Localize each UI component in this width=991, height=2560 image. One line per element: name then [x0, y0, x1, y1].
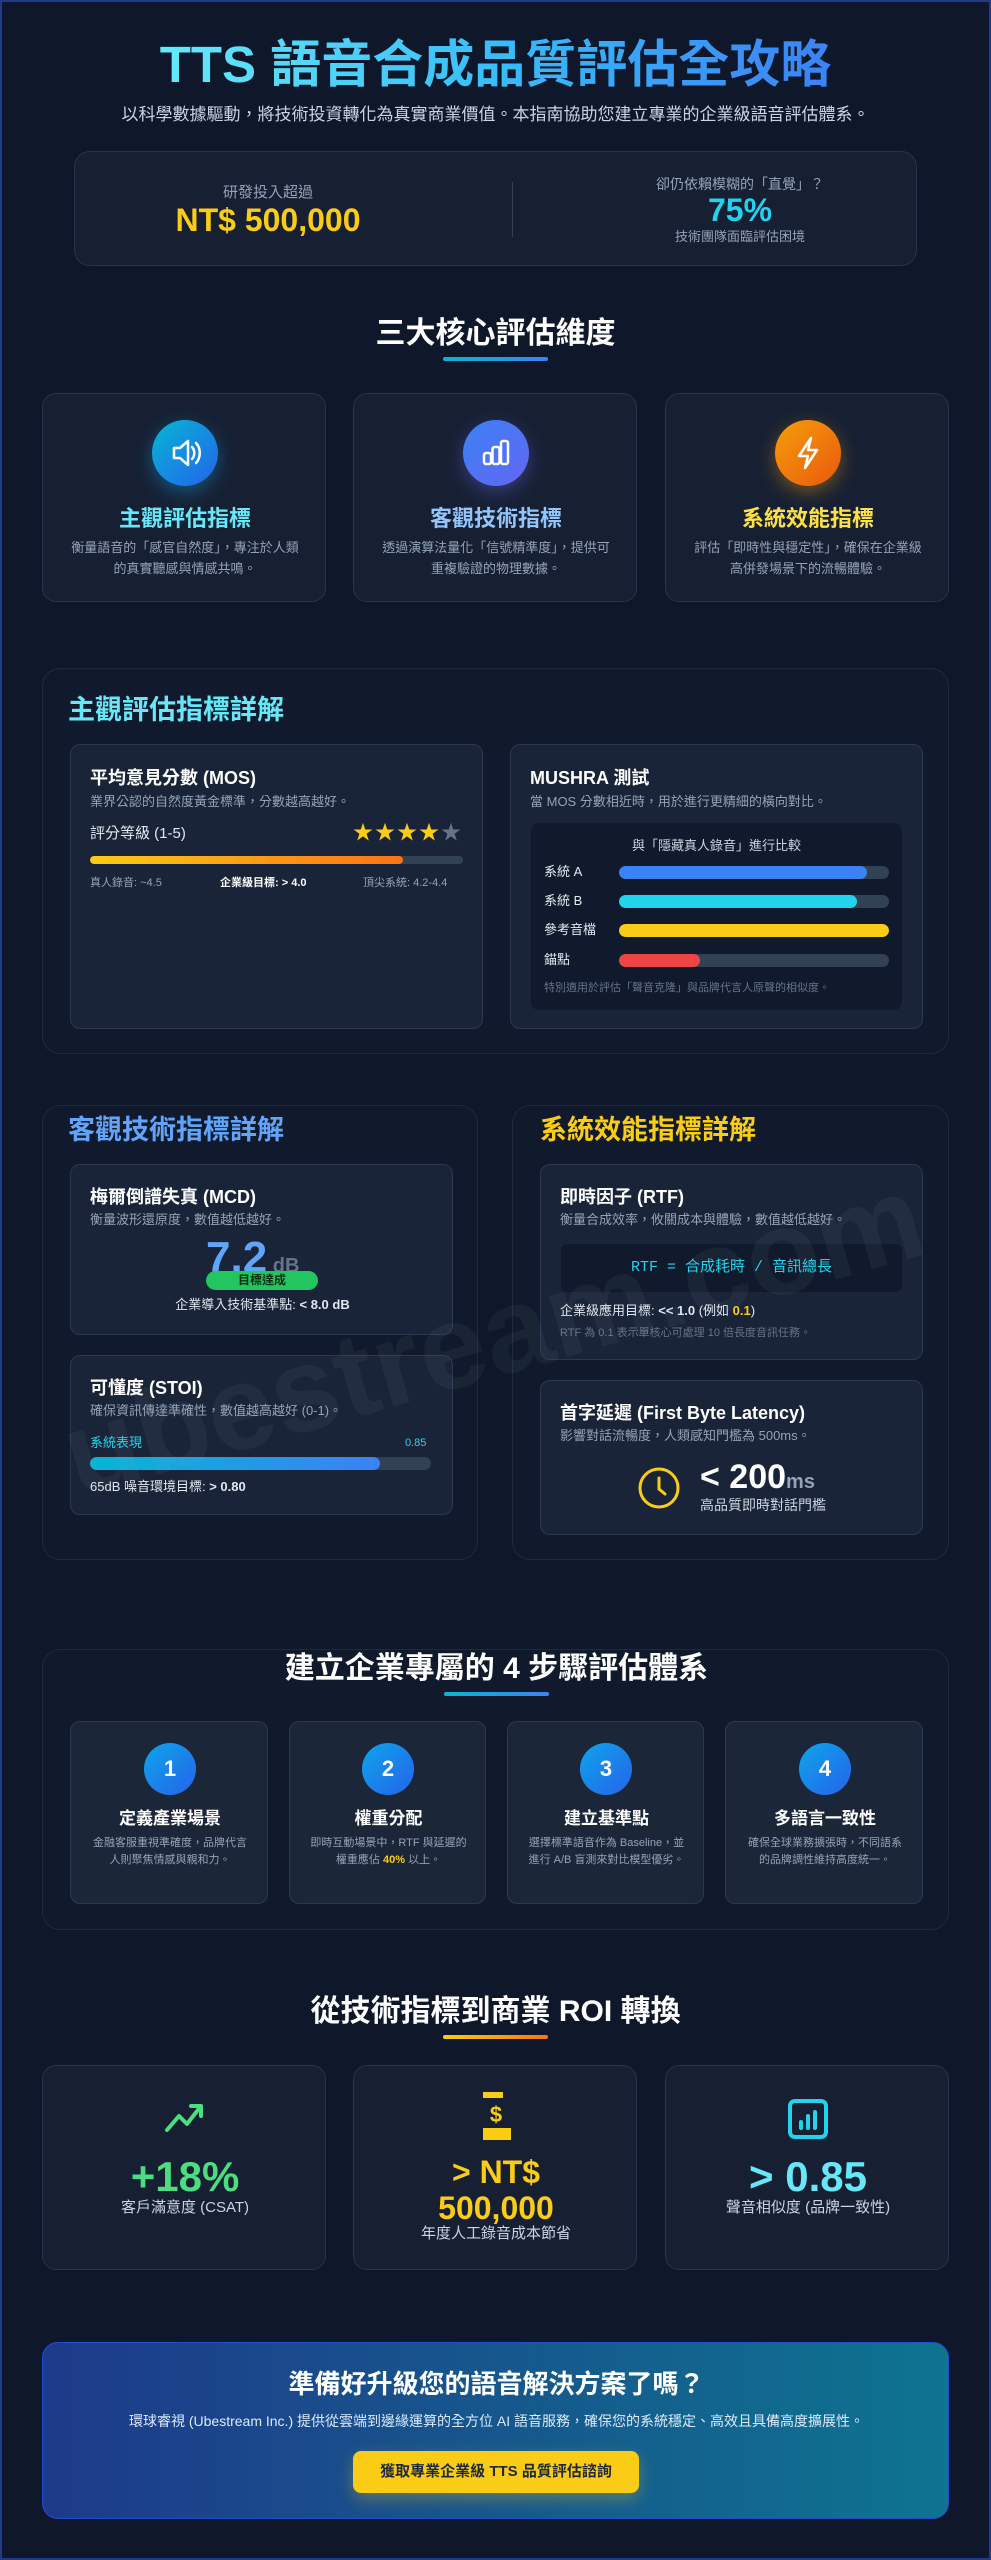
stats box: NT$ 500,000: [175, 202, 360, 238]
heading: three dimensions: 三大核心評估維度: [376, 317, 616, 350]
heading: 主觀評估指標詳解: [68, 695, 284, 725]
formula: RTF = 合成耗時 / 音訊總長: [631, 1259, 832, 1276]
ROI card: CSAT: 客戶滿意度 (CSAT): [121, 2199, 249, 2216]
ROI card: cost saving: 500,000: [438, 2190, 554, 2226]
card: MOS: [70, 744, 483, 1029]
icon: trend up: [164, 2104, 204, 2132]
ROI card: similarity: > 0.85: [749, 2153, 867, 2200]
ROI card: cost saving: > NT$: [452, 2154, 540, 2190]
card: MUSHRA: 當 MOS 分數相近時，用於進行更精細的橫向對比。: [530, 794, 827, 809]
card: performance: [665, 393, 949, 602]
card: MOS: 真人錄音: ~4.5: [90, 877, 162, 889]
ROI card: CSAT: +18%: [131, 2153, 239, 2200]
step 3: 建立基準點: [564, 1809, 649, 1828]
card: MCD: [70, 1164, 453, 1335]
step 3: 3: [600, 1756, 612, 1781]
comparison chart: 參考音檔: [544, 922, 596, 937]
button: [353, 2451, 639, 2493]
icon: money: $: [490, 2102, 502, 2127]
card: MUSHRA: MUSHRA 測試: [530, 768, 649, 788]
card: MCD: 7.2 dB: [206, 1233, 299, 1282]
card: RTF: [540, 1164, 923, 1360]
panel: objective details: 客觀技術指標詳解: [68, 1115, 284, 1145]
ROI card: CSAT: [42, 2065, 326, 2270]
CTA box: [42, 2342, 949, 2519]
card: performance: 評估「即時性與穩定性」，確保在企業級高併發場景下的流暢體驗。: [694, 540, 922, 576]
panel: 4 steps: [42, 1649, 949, 1930]
card: latency: 首字延遲 (First Byte Latency): [560, 1403, 805, 1423]
comparison chart: 與「隱藏真人錄音」進行比較: [632, 838, 801, 853]
step 4: 4: [819, 1756, 831, 1781]
CTA box: 環球睿視 (Ubestream Inc.) 提供從雲端到邊緣運算的全方位 AI 語音服務，確保您的系統穩定、高效且具備高度擴展性。: [129, 2413, 864, 2429]
card: MUSHRA: [510, 744, 923, 1029]
card: MOS: 評分等級 (1-5): [90, 825, 186, 842]
step 4: [725, 1721, 923, 1904]
card: MOS: 企業級目標: > 4.0: [220, 877, 306, 889]
title: TTS 語音合成品質評估全攻略: [160, 36, 831, 93]
stats box: [74, 151, 917, 266]
card: objective: [353, 393, 637, 602]
icon: clock: [638, 1468, 680, 1508]
card: MCD: 企業導入技術基準點: < 8.0 dB: [175, 1297, 350, 1312]
card: objective: 透過演算法量化「信號精準度」，提供可重複驗證的物理數據。: [382, 540, 610, 576]
card: MOS: 業界公認的自然度黃金標準，分數越高越好。: [90, 794, 350, 809]
badge: 目標達成: [238, 1273, 286, 1287]
step 2: 即時互動場景中，RTF 與延遲的權重應佔 40% 以上。: [310, 1837, 467, 1866]
card: RTF: RTF 為 0.1 表示單核心可處理 10 倍長度音訊任務。: [560, 1327, 811, 1339]
panel: objective details: [42, 1105, 478, 1560]
card: subjective: [42, 393, 326, 602]
card: STOI: 系統表現: [90, 1435, 142, 1450]
heading: 建立企業專屬的 4 步驟評估體系: [285, 1652, 708, 1685]
stats box: 75%: [708, 192, 772, 228]
panel: subjective details: [42, 668, 949, 1054]
card: latency: < 200ms: [700, 1458, 815, 1496]
ROI card: cost saving: 年度人工錄音成本節省: [421, 2225, 571, 2242]
icon: money: [483, 2092, 511, 2140]
ROI card: similarity: [665, 2065, 949, 2270]
heading: ROI: 從技術指標到商業 ROI 轉換: [310, 1995, 680, 2028]
card: subjective: 衡量語音的「感官自然度」，專注於人類的真實聽感與情感共鳴。: [71, 540, 299, 576]
step 2: [289, 1721, 486, 1904]
stats box: 技術團隊面臨評估困境: [675, 229, 805, 244]
step 2: 2: [382, 1756, 394, 1781]
step 3: 選擇標準語音作為 Baseline，並進行 A/B 盲測來對比模型優劣。: [529, 1837, 684, 1866]
icon: bar chart: [463, 420, 529, 486]
subtitle: 以科學數據驅動，將技術投資轉化為真實商業價值。本指南協助您建立專業的企業級語音評估體系。: [122, 105, 870, 124]
stat: 75%: 卻仍依賴模糊的「直覺」？: [656, 176, 824, 192]
comparison chart: 錨點: [544, 952, 570, 967]
card: MCD: 衡量波形還原度，數值越低越好。: [90, 1212, 285, 1227]
step 1: 定義產業場景: [119, 1809, 221, 1828]
comparison chart: 特別適用於評估「聲音克隆」與品牌代言人原聲的相似度。: [544, 982, 830, 994]
icon: chart square: [788, 2099, 828, 2139]
card: latency: 高品質即時對話門檻: [700, 1497, 826, 1513]
card: performance: 系統效能指標: [742, 506, 874, 531]
card: STOI: [70, 1355, 453, 1515]
step 1: 1: [164, 1756, 176, 1781]
card: MCD: 梅爾倒譜失真 (MCD): [90, 1187, 256, 1207]
panel: performance details: [512, 1105, 949, 1560]
watermark: ubestream.com: [48, 1149, 938, 1522]
panel: performance details: 系統效能指標詳解: [540, 1115, 756, 1145]
comparison chart: 系統 A: [544, 864, 582, 879]
icon: speaker: [152, 420, 218, 486]
badge: [206, 1271, 318, 1290]
card: STOI: 可懂度 (STOI): [90, 1378, 203, 1398]
button: 獲取專業企業級 TTS 品質評估諮詢: [380, 2463, 612, 2480]
card: RTF: 企業級應用目標: << 1.0 (例如 0.1): [560, 1303, 755, 1318]
ROI card: similarity: 聲音相似度 (品牌一致性): [726, 2199, 890, 2216]
stars: ★★★★★: [353, 822, 463, 844]
step 1: 金融客服重視準確度，品牌代言人則聚焦情感與親和力。: [93, 1837, 247, 1866]
card: STOI: 65dB 噪音環境目標: > 0.80: [90, 1479, 246, 1494]
card: latency: 影響對話流暢度，人類感知門檻為 500ms。: [560, 1428, 811, 1443]
MOS bar: [90, 856, 463, 864]
step 3: [507, 1721, 704, 1904]
comparison chart: [531, 823, 902, 1010]
card: MOS: 平均意見分數 (MOS): [90, 768, 256, 788]
card: subjective: 主觀評估指標: [119, 506, 251, 531]
comparison chart: 系統 B: [544, 893, 582, 908]
card: objective: 客觀技術指標: [430, 506, 562, 531]
CTA box: 準備好升級您的語音解決方案了嗎？: [288, 2369, 704, 2399]
card: latency: [540, 1380, 923, 1535]
ROI card: cost saving: [353, 2065, 637, 2270]
step 4: 確保全球業務擴張時，不同語系的品牌調性維持高度統一。: [748, 1837, 902, 1866]
step 2: 權重分配: [354, 1809, 422, 1828]
step 1: [70, 1721, 268, 1904]
card: STOI: 確保資訊傳達準確性，數值越高越好 (0-1)。: [90, 1403, 342, 1418]
card: MOS: 頂尖系統: 4.2-4.4: [363, 877, 447, 889]
card: RTF: 衡量合成效率，攸關成本與體驗，數值越低越好。: [560, 1212, 846, 1227]
formula: [561, 1244, 902, 1292]
card: STOI: 0.85: [405, 1437, 426, 1449]
card: RTF: 即時因子 (RTF): [560, 1187, 684, 1207]
stat: investment: 研發投入超過: [223, 184, 313, 201]
step 4: 多語言一致性: [774, 1809, 876, 1828]
icon: lightning: [775, 420, 841, 486]
